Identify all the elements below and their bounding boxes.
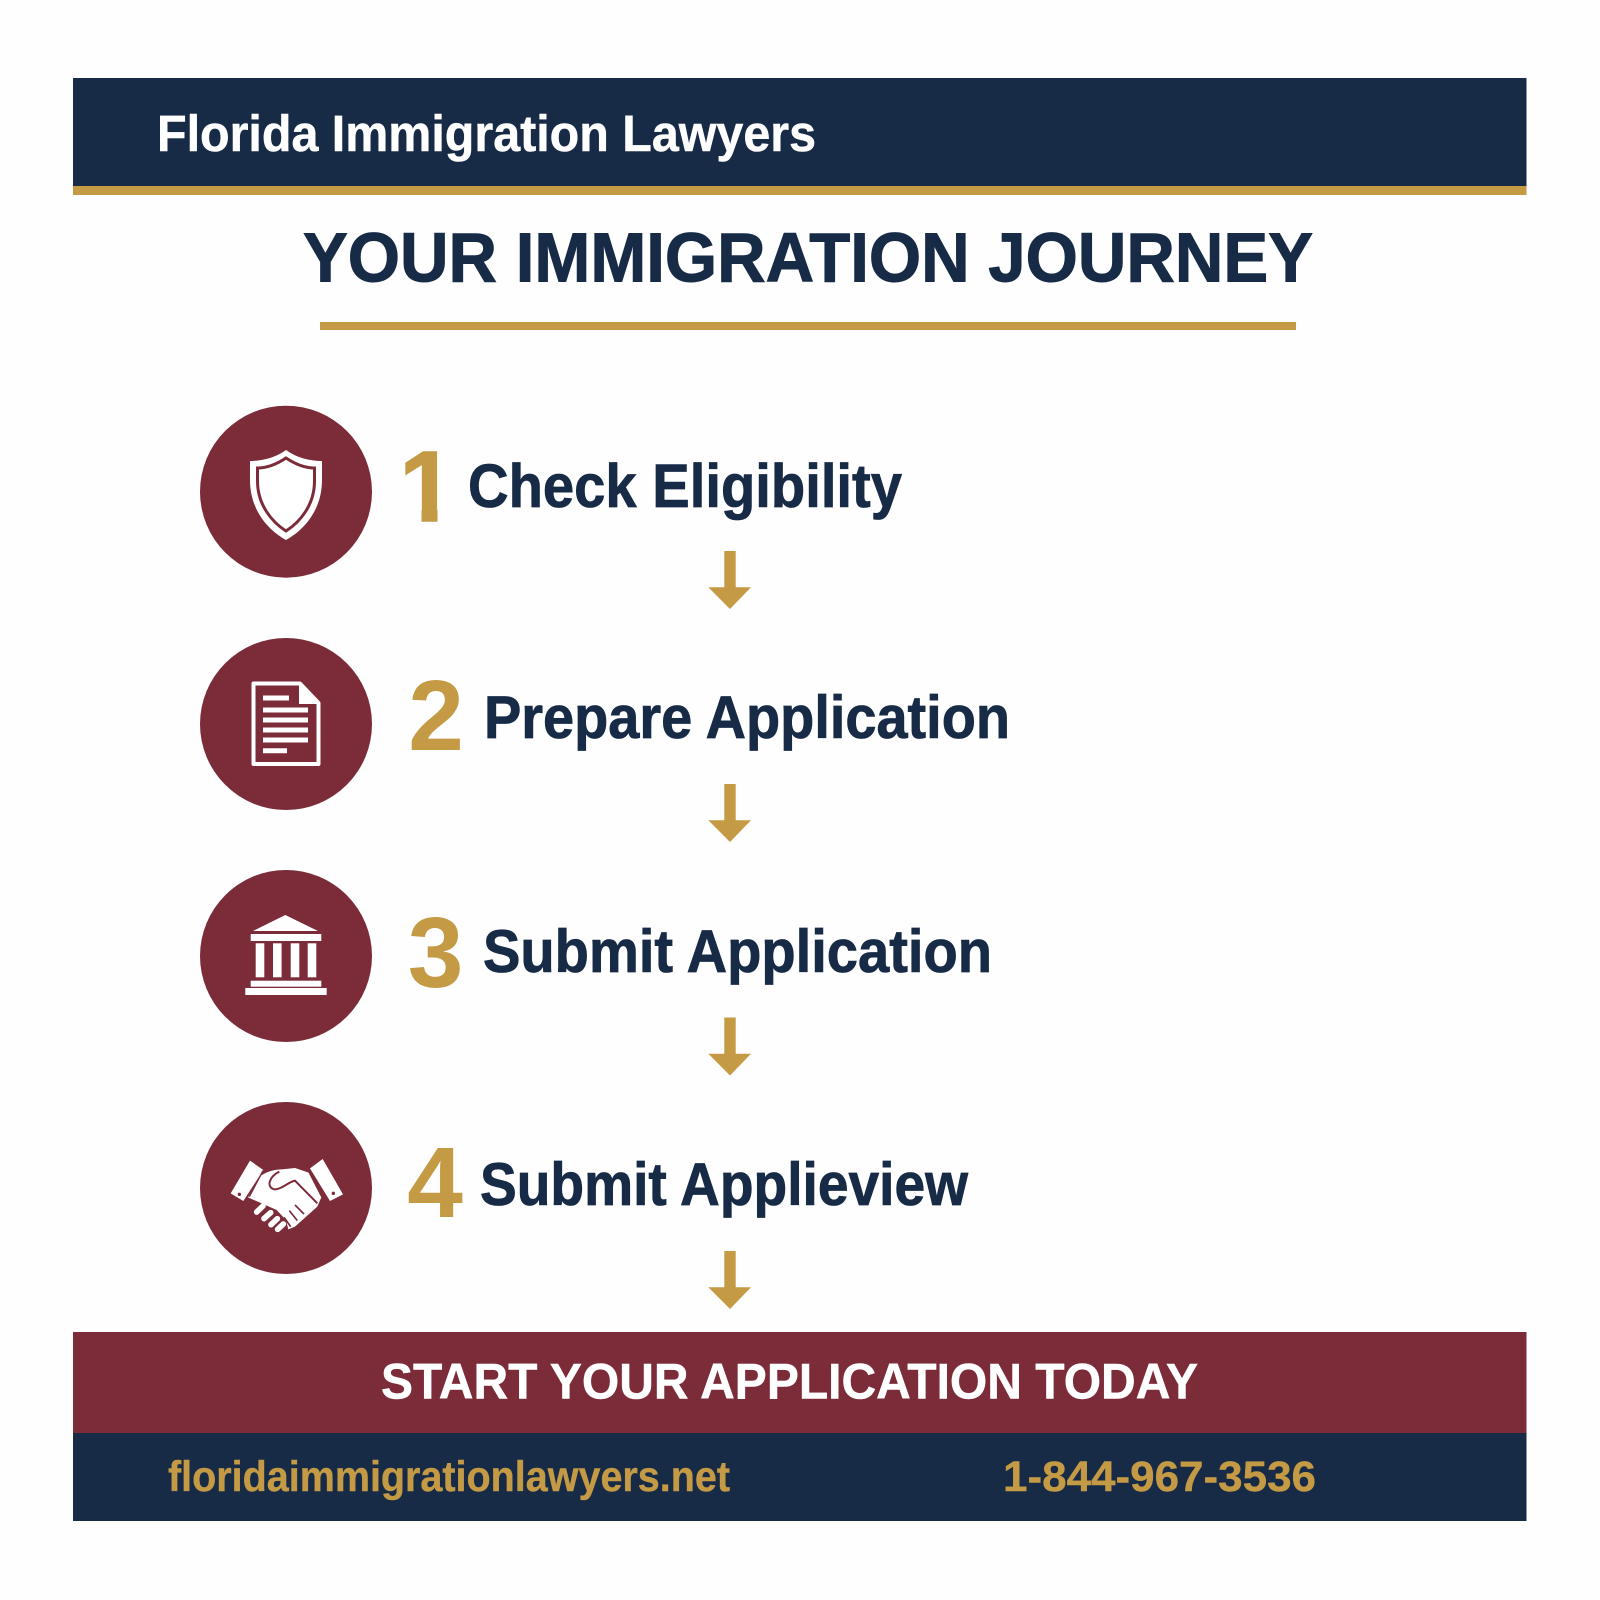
- step 1: check eligibility: [200, 406, 902, 578]
- step label 4: Submit Applieview: [480, 1151, 968, 1218]
- arrow 3: [708, 1018, 751, 1076]
- arrow 2: [708, 784, 751, 842]
- icon: courthouse: [200, 870, 372, 1042]
- heading: firm name: Florida Immigration Lawyers: [157, 105, 816, 162]
- arrow 1: [708, 551, 751, 609]
- icon: shield: [200, 406, 372, 578]
- step 2: prepare application: [200, 638, 1010, 810]
- panel: header band: [73, 78, 1526, 195]
- icon: handshake: [200, 1102, 372, 1274]
- step number 1: 1: [399, 431, 455, 543]
- arrow 4: [708, 1251, 751, 1309]
- step number 3: 3: [408, 897, 463, 1009]
- step label 3: Submit Application: [483, 918, 992, 985]
- call to action text: START YOUR APPLICATION TODAY: [381, 1354, 1198, 1410]
- phone number: 1-844-967-3536: [1003, 1453, 1316, 1501]
- step number 2: 2: [408, 660, 464, 772]
- title block: [303, 218, 1313, 330]
- step label 1: Check Eligibility: [468, 452, 902, 520]
- icon: document: [200, 638, 372, 810]
- panel: contact band: [73, 1433, 1526, 1521]
- step label 2: Prepare Application: [484, 684, 1010, 751]
- panel: call to action band: [73, 1332, 1526, 1433]
- website: floridaimmigrationlawyers.net: [168, 1453, 730, 1501]
- step number 4: 4: [407, 1127, 463, 1239]
- title: YOUR IMMIGRATION JOURNEY: [303, 218, 1313, 296]
- step 4: submit applieview: [200, 1102, 968, 1274]
- step 3: submit application: [200, 870, 992, 1042]
